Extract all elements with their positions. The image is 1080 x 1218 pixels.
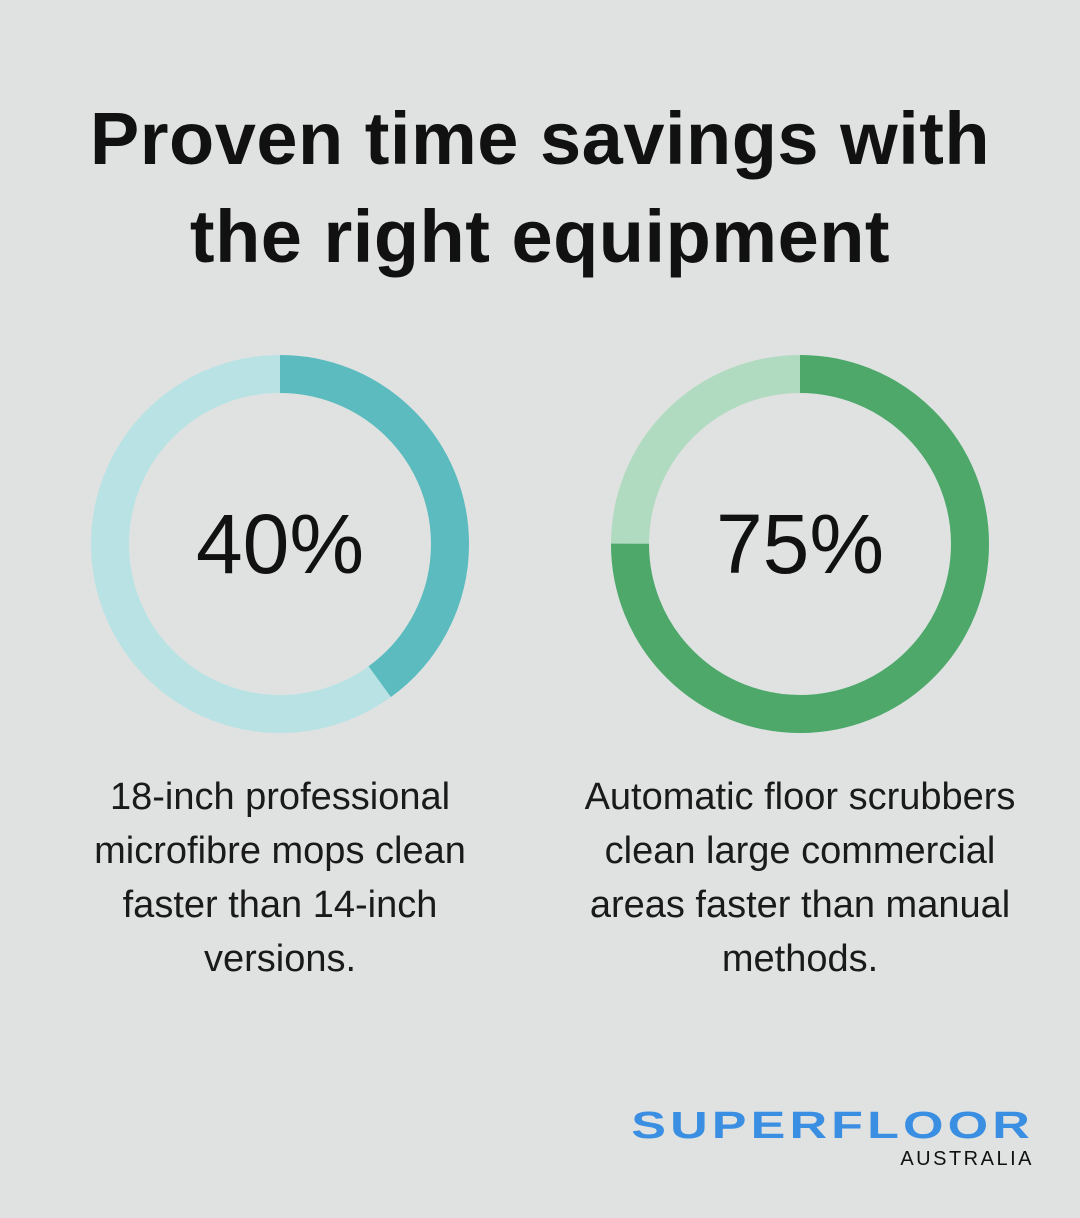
logo: AUSTRALIA — [900, 1148, 1034, 1170]
title: the right equipment — [190, 195, 890, 278]
caption: mops: 18-inch professional microfibre mops clean faster than 14-inch versions. — [94, 776, 466, 980]
logo — [631, 1105, 1034, 1170]
title: Proven time savings with — [90, 97, 990, 180]
stat: 75%: 75% — [716, 497, 884, 591]
logo: SUPERFLOOR — [631, 1105, 1034, 1147]
stat: 40%: 40% — [196, 497, 364, 591]
donut chart: 75% — [611, 355, 989, 733]
caption: scrubbers: Automatic floor scrubbers clean large commercial areas faster than manual methods. — [585, 776, 1015, 980]
donut chart: 40% — [91, 355, 469, 733]
title — [90, 97, 990, 278]
